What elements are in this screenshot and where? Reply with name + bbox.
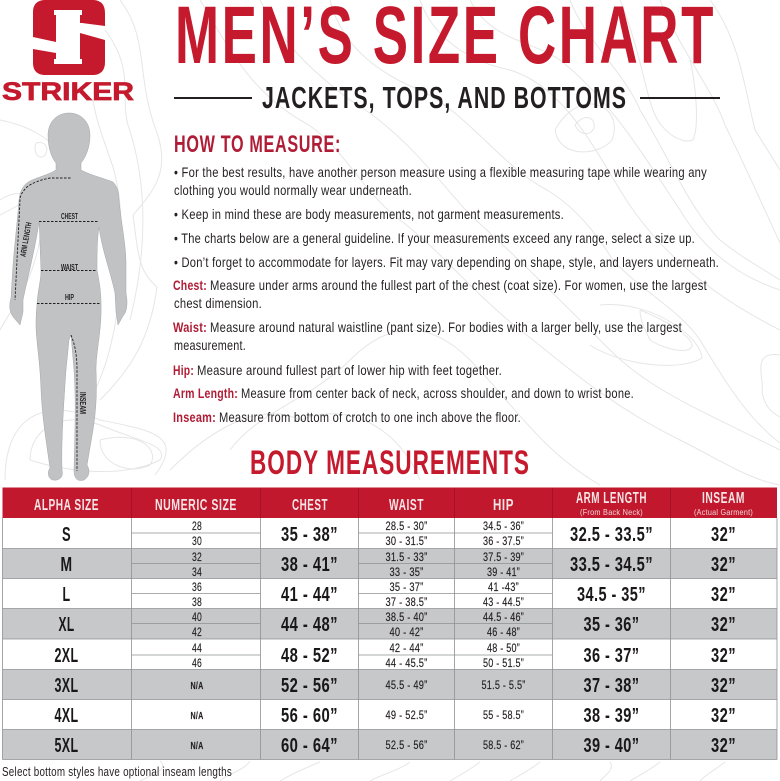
column: arm length: 35 - 36” (584, 614, 640, 636)
column: numeric size: 32 (192, 552, 202, 564)
logo: Striker (2, 0, 134, 106)
column: hip: 41 -43” (488, 582, 519, 594)
table header: NUMERIC SIZE (155, 497, 237, 514)
column: alpha size (54, 524, 78, 757)
table header: (Actual Garment) (694, 507, 753, 517)
column: waist (386, 521, 428, 752)
column: inseam: 32” (711, 614, 736, 636)
table header (2, 488, 777, 518)
column: hip: 36 - 37.5” (483, 536, 524, 548)
row backgrounds (2, 518, 777, 760)
column: numeric size: N/A (190, 711, 204, 722)
column: chest: 44 - 48” (281, 614, 338, 636)
column: numeric size: 36 (192, 582, 202, 594)
text block: measurement definitions: Measure around fullest part of lower hip with feet together. (197, 362, 502, 378)
column: waist: 37 - 38.5” (386, 597, 428, 609)
column: chest: 38 - 41” (281, 554, 338, 576)
column: waist: 33 - 35” (390, 567, 424, 579)
text block: measurement definitions: Hip: (173, 362, 194, 378)
column: waist: 42 - 44” (390, 643, 424, 655)
column: alpha size: XL (58, 614, 74, 636)
icon: S emblem (33, 0, 105, 75)
text block: measurement definitions: Arm Length: (173, 385, 238, 401)
text block: measuring tips: • Keep in mind these are body measurements, not garment measurements. (174, 206, 564, 222)
text block: measurement definitions: Inseam: (173, 409, 216, 425)
column: chest (281, 524, 338, 757)
grid lines (2, 518, 777, 760)
column: inseam: 32” (711, 735, 736, 757)
table header: WAIST (389, 497, 424, 514)
column: numeric size (190, 521, 204, 752)
text block: measuring tips (174, 164, 719, 270)
label: waist: WAIST (61, 263, 78, 272)
waist dashed line (41, 270, 97, 272)
column: numeric size: 34 (192, 567, 202, 579)
column: inseam: 32” (711, 705, 736, 727)
column: numeric size: 42 (192, 627, 202, 639)
text block: measuring tips: clothing you would normally wear underneath. (174, 182, 412, 198)
label: chest: CHEST (61, 212, 78, 221)
column: waist: 38.5 - 40” (386, 612, 428, 624)
column: hip: 58.5 - 62” (483, 740, 524, 752)
label: hip: HIP (65, 293, 74, 302)
label: inseam: INSEAM (78, 392, 87, 414)
column: numeric size: 30 (192, 536, 202, 548)
column: hip: 55 - 58.5” (483, 710, 524, 722)
column: arm length: 32.5 - 33.5” (570, 524, 653, 546)
column: numeric size: N/A (190, 741, 204, 752)
column: numeric size: 38 (192, 597, 202, 609)
text block: measurement definitions: Chest: (173, 277, 207, 293)
column: hip: 43 - 44.5” (483, 597, 524, 609)
column: inseam (711, 524, 736, 757)
column: inseam: 32” (711, 554, 736, 576)
column: waist: 52.5 - 56” (386, 740, 428, 752)
column: arm length (570, 524, 653, 757)
column: chest: 56 - 60” (281, 705, 338, 727)
text block: measurement definitions: chest dimension. (174, 295, 262, 311)
text block: measurement definitions: Measure from center back of neck, across shoulder, and down to wrist bone. (241, 385, 634, 401)
column: waist: 40 - 42” (390, 627, 424, 639)
column: alpha size: L (62, 584, 70, 606)
column: arm length: 33.5 - 34.5” (570, 554, 653, 576)
figure: body measurement silhouette (10, 113, 127, 481)
text block: measurement definitions: measurement. (174, 337, 246, 353)
column: waist: 44 - 45.5” (386, 658, 428, 670)
column: hip: 44.5 - 46” (483, 612, 524, 624)
column: hip (482, 521, 526, 752)
text block: measurement definitions: Measure from bottom of crotch to one inch above the floor. (219, 409, 521, 425)
column: chest: 52 - 56” (281, 675, 338, 697)
column: numeric size: N/A (190, 681, 204, 692)
table header: ALPHA SIZE (34, 497, 99, 514)
subtitle with rules: JACKETS, TOPS, AND BOTTOMS (262, 80, 627, 115)
column: arm length: 39 - 40” (584, 735, 640, 757)
column: numeric size: 44 (192, 643, 202, 655)
column: alpha size: 2XL (54, 645, 78, 667)
column: hip: 51.5 - 5.5” (482, 680, 526, 692)
column: hip: 39 - 41” (487, 567, 520, 579)
table header: CHEST (292, 497, 328, 514)
text block: measurement definitions (173, 277, 707, 425)
text block: measurement definitions: Waist: (173, 319, 207, 335)
column: hip: 48 - 50” (487, 643, 520, 655)
column: arm length: 37 - 38” (584, 675, 640, 697)
footnote: Select bottom styles have optional inseam lengths (2, 765, 232, 779)
column: alpha size: 5XL (54, 735, 78, 757)
column: alpha size: 3XL (54, 675, 78, 697)
label: arm length: ARM LENGTH (19, 221, 34, 258)
column: inseam: 32” (711, 584, 736, 606)
column: alpha size: M (60, 554, 72, 576)
inseam dashed line (71, 335, 77, 471)
column: waist: 35 - 37” (390, 582, 424, 594)
column: waist: 45.5 - 49” (386, 680, 428, 692)
column: waist: 28.5 - 30” (386, 521, 428, 533)
column: inseam: 32” (711, 675, 736, 697)
column: numeric size: 28 (192, 521, 202, 533)
silhouette (10, 113, 127, 481)
column: chest: 48 - 52” (281, 645, 338, 667)
column: chest: 60 - 64” (281, 735, 338, 757)
column: numeric size: 46 (192, 658, 202, 670)
column: hip: 50 - 51.5” (483, 658, 524, 670)
column: inseam: 32” (711, 645, 736, 667)
table header: INSEAM (702, 490, 745, 507)
column: hip: 34.5 - 36” (483, 521, 524, 533)
column: numeric size: 40 (192, 612, 202, 624)
column: chest: 41 - 44” (281, 584, 338, 606)
column: inseam: 32” (711, 524, 736, 546)
column: alpha size: 4XL (54, 705, 78, 727)
column: waist: 49 - 52.5” (386, 710, 428, 722)
table header: (From Back Neck) (580, 507, 643, 517)
column: arm length: 34.5 - 35” (577, 584, 646, 606)
column: arm length: 38 - 39” (584, 705, 640, 727)
table: body measurements (2, 488, 777, 760)
arm length dashed line (15, 178, 70, 300)
heading: how to measure: HOW TO MEASURE: (174, 131, 341, 158)
column: hip: 37.5 - 39” (483, 552, 524, 564)
column: arm length: 36 - 37” (584, 645, 640, 667)
chest dashed line (39, 220, 99, 222)
column: alpha size: S (62, 524, 71, 546)
table header: HIP (493, 497, 514, 514)
column: waist: 30 - 31.5” (386, 536, 428, 548)
wordmark: STRIKER (2, 78, 134, 106)
hip dashed line (37, 302, 101, 304)
column: hip: 46 - 48” (487, 627, 520, 639)
column: chest: 35 - 38” (281, 524, 338, 546)
table header: ARM LENGTH (576, 490, 647, 507)
column: waist: 31.5 - 33” (386, 552, 428, 564)
heading: body measurements: BODY MEASUREMENTS (250, 444, 530, 482)
